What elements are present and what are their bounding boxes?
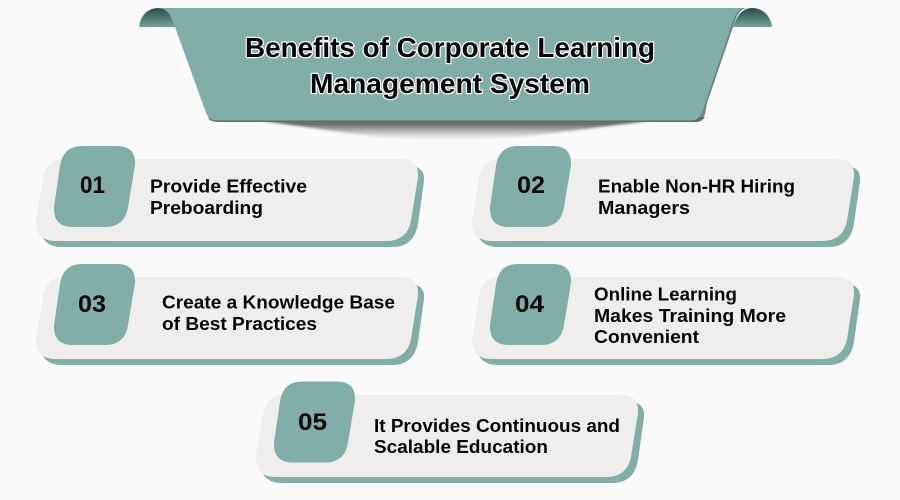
title line 1: Benefits of Corporate Learning <box>245 32 655 63</box>
card body <box>36 277 418 359</box>
card body <box>36 159 418 241</box>
card body <box>472 159 854 241</box>
card shadow <box>262 403 644 483</box>
card text: Preboarding <box>150 197 263 218</box>
card 02 <box>472 146 860 247</box>
number badge <box>54 264 135 345</box>
card shadow <box>478 285 860 365</box>
banner right edge <box>690 8 746 122</box>
card text: Convenient <box>594 326 699 347</box>
banner bottom edge <box>208 117 705 122</box>
card text: It Provides Continuous and <box>374 415 620 436</box>
number badge <box>490 146 571 227</box>
card 01 <box>36 146 424 247</box>
card body <box>256 395 638 477</box>
card text: Scalable Education <box>374 436 548 457</box>
left ribbon curl <box>139 8 176 27</box>
card text: Managers <box>598 197 690 218</box>
card body <box>472 277 854 359</box>
title <box>245 32 655 99</box>
title line 2: Management System <box>310 68 590 99</box>
card text: of Best Practices <box>162 313 317 334</box>
number: 03 <box>78 291 106 318</box>
card shadow <box>42 285 424 365</box>
card 04 <box>472 264 860 365</box>
number: 05 <box>298 409 327 436</box>
banner body <box>158 8 744 120</box>
right ribbon curl <box>733 8 772 27</box>
card text: Create a Knowledge Base <box>162 292 395 312</box>
title banner <box>139 8 772 141</box>
number badge <box>54 146 135 227</box>
card 03 <box>36 264 424 365</box>
number badge <box>274 382 355 462</box>
number: 04 <box>515 291 545 318</box>
number: 01 <box>80 172 105 199</box>
card text: Makes Training More <box>594 305 786 326</box>
number: 02 <box>517 172 545 199</box>
card shadow <box>478 167 860 247</box>
card 05 <box>256 382 644 483</box>
number badge <box>490 264 571 345</box>
card text: Enable Non-HR Hiring <box>598 176 795 196</box>
banner drop shadow <box>262 121 650 141</box>
card text: Online Learning <box>594 284 737 304</box>
card shadow <box>42 167 424 247</box>
card text: Provide Effective <box>150 176 307 196</box>
